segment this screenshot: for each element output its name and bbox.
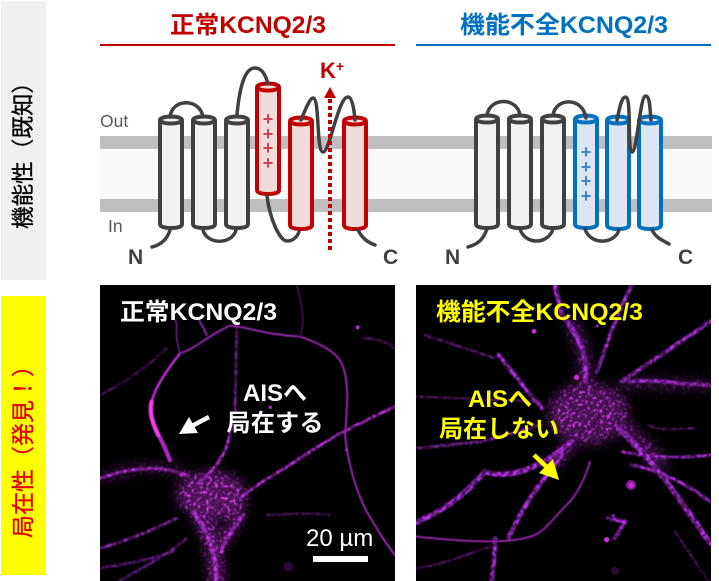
charge marks: + — [581, 186, 591, 206]
speckled dendrites — [100, 328, 395, 581]
gray transmembrane segments — [160, 116, 248, 228]
bright puncta — [532, 324, 636, 575]
callout: does not localize to AIS: 局在しない — [439, 416, 559, 443]
callout: localizes to AIS: 局在する — [226, 410, 324, 437]
charge marks: + — [581, 142, 591, 162]
callout: localizes to AIS — [226, 380, 324, 437]
heading: normal KCNQ2/3: 正常KCNQ2/3 — [170, 12, 326, 39]
label: normal KCNQ2/3: 正常KCNQ2/3 — [120, 299, 277, 326]
label: N terminus: N — [445, 246, 460, 269]
axon — [151, 285, 395, 555]
charge marks: + — [263, 153, 273, 173]
label: C terminus: C — [678, 246, 693, 269]
arrow: axon pointer — [534, 455, 559, 480]
connecting loops — [152, 68, 375, 247]
heading: dysfunctional KCNQ2/3: 機能不全KCNQ2/3 — [460, 12, 668, 39]
callout: localizes to AIS: AISへ — [243, 380, 307, 407]
label: C terminus: C — [383, 246, 398, 269]
bright puncta — [180, 325, 360, 571]
arrow: AIS pointer — [179, 417, 209, 434]
connecting loops — [468, 96, 669, 247]
unlocalized axon — [416, 462, 590, 541]
blue transmembrane segments — [575, 116, 661, 229]
potassium flow arrow — [324, 87, 336, 250]
soma — [548, 325, 710, 465]
channel diagram: normal KCNQ2/3 — [128, 58, 398, 269]
label: In: In — [108, 216, 123, 236]
charge marks: + — [263, 138, 273, 158]
charge marks — [263, 109, 273, 173]
side label: function (known): 機能性（既知） — [11, 71, 36, 229]
callout: does not localize to AIS: AISへ — [468, 386, 532, 413]
speckled dendrites — [416, 285, 710, 581]
charge marks: + — [581, 157, 591, 177]
side label: localization (discovery): 局在性（発見！） — [10, 354, 36, 538]
charge marks — [581, 142, 591, 206]
charge marks: + — [263, 109, 273, 129]
micrograph: dysfunctional KCNQ2/3 — [416, 285, 711, 581]
soma — [100, 468, 247, 581]
cell membrane — [100, 136, 712, 212]
label: K+: + — [336, 58, 344, 74]
label: Out: Out — [100, 111, 128, 131]
side label: localization (discovery) — [1, 296, 46, 575]
red transmembrane segments — [257, 84, 366, 229]
gray transmembrane segments — [476, 116, 564, 228]
micrograph: normal KCNQ2/3 — [100, 285, 395, 581]
side label: function (known) — [1, 1, 46, 280]
scale bar: 20 µm — [306, 525, 373, 552]
callout: does not localize to AIS — [439, 386, 559, 443]
charge marks: + — [581, 171, 591, 191]
label: K+: K — [320, 58, 336, 83]
charge marks: + — [263, 124, 273, 144]
label: N terminus: N — [128, 246, 143, 269]
channel diagram: dysfunctional KCNQ2/3 — [445, 96, 693, 269]
label: dysfunctional KCNQ2/3: 機能不全KCNQ2/3 — [436, 299, 643, 326]
